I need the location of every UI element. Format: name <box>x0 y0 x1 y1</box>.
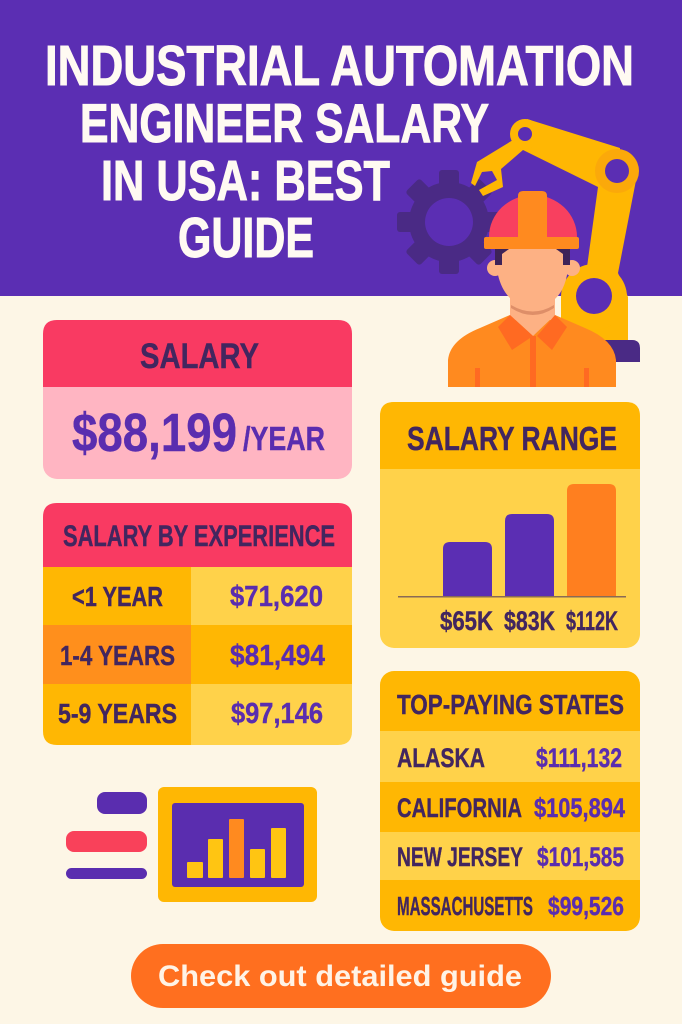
title <box>45 34 634 270</box>
row: 5-9 years: 5-9 YEARS <box>58 698 177 729</box>
row: Massachusetts: MASSACHUSETTS <box>397 891 533 921</box>
range heading: SALARY RANGE <box>407 420 617 457</box>
panel: salary <box>43 320 352 479</box>
icon: text lines <box>66 792 147 879</box>
panel: salary by experience <box>43 503 352 745</box>
experience heading: SALARY BY EXPERIENCE <box>63 520 335 553</box>
row: Alaska: ALASKA <box>397 743 485 773</box>
row: 5-9 years: $97,146 <box>231 698 323 730</box>
row: California: CALIFORNIA <box>397 793 522 823</box>
bar chart: $83K <box>504 606 555 636</box>
row: California: $105,894 <box>534 793 625 823</box>
bar chart: $65K <box>440 606 493 636</box>
row: under 1 year: <1 YEAR <box>72 581 163 612</box>
row: 1-4 years: $81,494 <box>230 640 325 672</box>
row: 5-9 years <box>43 684 352 745</box>
bar chart <box>398 484 626 636</box>
header band <box>0 0 682 296</box>
title: GUIDE <box>178 206 314 270</box>
row: Alaska <box>397 743 622 773</box>
row: 1-4 years: 1-4 YEARS <box>60 640 175 671</box>
salary amount: $88,199 <box>72 403 237 463</box>
row: under 1 year: $71,620 <box>230 581 323 613</box>
range header <box>380 402 640 469</box>
icon: monitor with bars <box>158 787 317 902</box>
icon: robot arm <box>471 119 640 362</box>
salary heading: SALARY <box>140 337 259 376</box>
button: call to action <box>131 944 551 1008</box>
icon: gear <box>397 170 501 274</box>
title: ENGINEER SALARY <box>80 92 489 154</box>
row: Massachusetts: $99,526 <box>548 891 624 921</box>
bar chart: $112K <box>566 606 618 636</box>
icon: engineer <box>448 191 616 387</box>
title: IN USA: BEST <box>101 149 390 213</box>
panel: salary range <box>380 402 640 648</box>
row: New Jersey: $101,585 <box>537 842 624 872</box>
per year unit: /YEAR <box>243 420 325 457</box>
row: New Jersey: NEW JERSEY <box>397 842 523 872</box>
salary header <box>43 320 352 387</box>
states heading: TOP-PAYING STATES <box>397 689 624 720</box>
button: call to action: Check out detailed guide <box>158 960 522 993</box>
row: 1-4 years <box>43 625 352 684</box>
row: Alaska: $111,132 <box>536 743 622 773</box>
row: under 1 year <box>43 567 352 625</box>
panel: top-paying states <box>380 671 640 931</box>
